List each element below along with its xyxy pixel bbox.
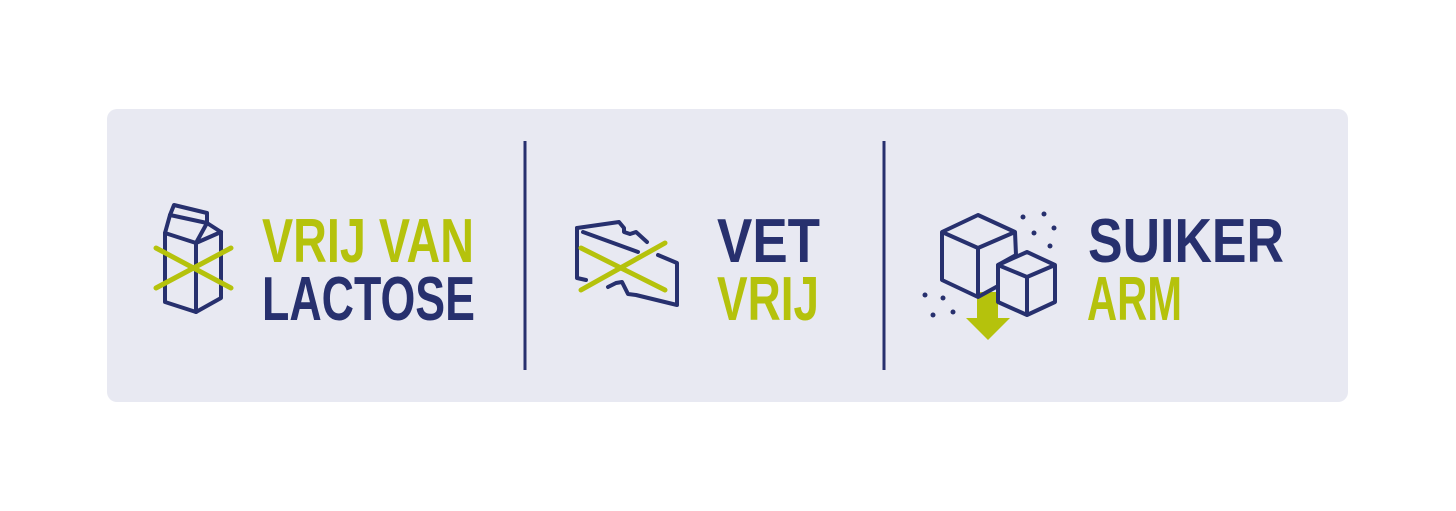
heading: VET VRIJ — [717, 207, 820, 334]
heading: VRIJ VAN LACTOSE — [262, 207, 475, 334]
heading: VRIJ VAN LACTOSE: VRIJ VAN — [262, 207, 474, 276]
heading: VET VRIJ: VET — [717, 207, 820, 276]
panel: background card — [107, 109, 1348, 402]
heading: SUIKER ARM: SUIKER — [1088, 207, 1284, 276]
icon: cheese crossed — [577, 222, 677, 305]
heading: SUIKER ARM: ARM — [1087, 265, 1182, 334]
icon: milk carton crossed — [156, 205, 231, 312]
icon: sugar cubes with down arrow — [922, 212, 1056, 340]
heading: VET VRIJ: VRIJ — [717, 265, 819, 334]
heading: SUIKER ARM — [1087, 207, 1284, 334]
heading: VRIJ VAN LACTOSE: LACTOSE — [262, 265, 475, 334]
